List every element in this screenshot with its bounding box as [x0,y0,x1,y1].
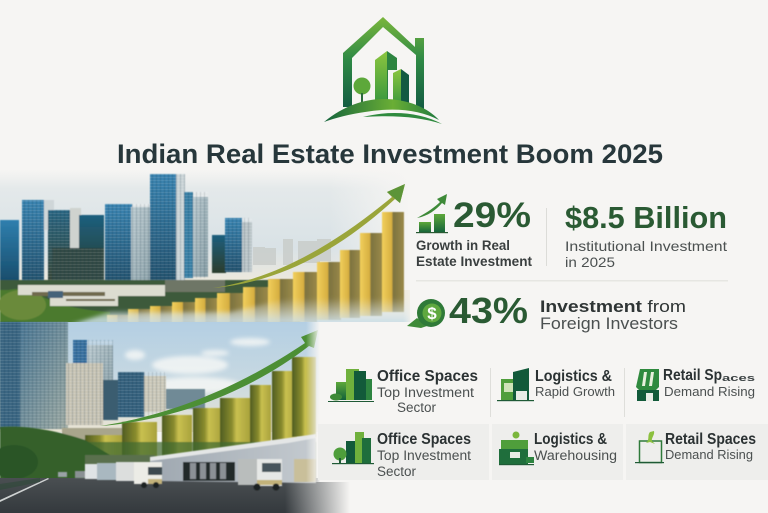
icon: storefront [636,369,659,401]
divider [546,208,547,266]
stat: 29% growth: Estate Investment [416,254,533,269]
icon: logistics building [497,368,534,401]
card: office spaces, row 2: Sector [377,464,416,479]
card: logistics, row 2: Logistics & [534,431,607,448]
image fade overlays [285,170,768,513]
card: logistics, row 1: Rapid Growth [535,384,615,399]
card: office spaces, row 2 [332,431,471,479]
stat: 43% foreign investors: Investment from [540,297,686,316]
icon: towers and tree [332,432,374,464]
card: retail, row 1 [636,367,755,401]
card: office spaces, row 2: Top Investment [377,448,471,463]
card: retail, row 2 [635,431,756,463]
stat: 29% growth: 29% [453,196,531,235]
card: office spaces, row 1: Top Investment [377,385,474,400]
card: office spaces, row 1: Sector [397,400,436,415]
card: logistics, row 2 [499,431,617,465]
photo: offices, green bars and logistics yard [0,322,350,513]
card: office spaces, row 1 [328,368,478,415]
photo: city skyline with gold bars [0,170,410,327]
trucks [58,459,282,490]
icon: warehouse and delivery truck [499,432,534,465]
card: retail, row 1: aces [722,373,755,383]
row 2 panel backgrounds [318,424,768,480]
card: retail, row 1: Demand Rising [664,384,755,399]
card: office spaces, row 1: Office Spaces [377,368,478,385]
icon: office towers [328,369,374,402]
card: logistics, row 1: Logistics & [535,368,612,385]
stat: 29% growth: Growth in Real [416,238,510,253]
row 1 dividers [490,368,625,417]
card: retail, row 2: Demand Rising [665,447,753,462]
title: Indian Real Estate Investment Boom 2025 [117,139,663,169]
icon: dollar coin [407,299,445,328]
stat: 43% foreign investors: Foreign Investors [540,314,678,333]
card: logistics, row 2: Warehousing [534,448,617,463]
stat: $8.5 Billion [565,200,727,270]
arrow: green rising curve [100,330,318,426]
card: office spaces, row 2: Office Spaces [377,431,471,448]
stat: 29% growth [416,194,533,269]
stat: $8.5 Billion: Institutional Investment [565,238,727,254]
card: retail, row 1: Retail Sp [663,367,722,384]
icon: shopping bag [635,431,664,463]
stat: $8.5 Billion: $8.5 Billion [565,200,727,235]
logo: green house with towers [324,17,442,124]
stat: 43% foreign investors: 43% [449,290,528,331]
icon: dollar coin: $ [427,304,437,323]
divider [416,280,728,282]
icon: rising bars with arrow [416,194,448,233]
card: retail, row 2: Retail Spaces [665,431,756,448]
card: logistics, row 1 [497,368,615,401]
arrow: gold-green rising curve [213,184,405,288]
arrow head: upper chart [387,184,405,203]
stat: $8.5 Billion: in 2025 [565,254,615,270]
stat: 43% foreign investors [407,290,686,333]
warehouse [150,434,316,483]
